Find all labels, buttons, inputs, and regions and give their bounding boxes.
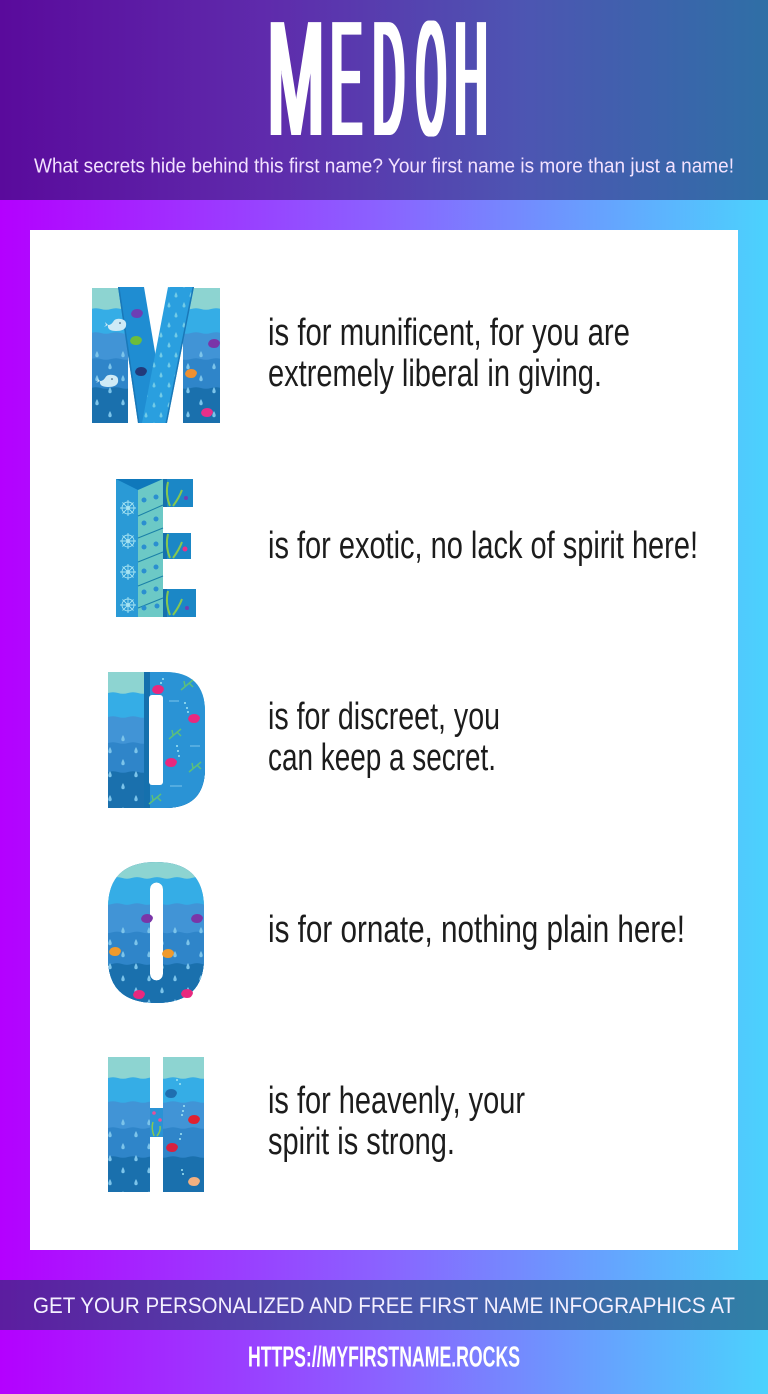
title: MEDOH (268, 0, 487, 170)
panel: white content card (30, 230, 738, 1250)
footer text: GET YOUR PERSONALIZED AND FREE FIRST NAME INFOGRAPHICS AT (33, 1293, 735, 1318)
text: H line: is for heavenly, your (268, 1080, 525, 1122)
header banner (0, 0, 768, 200)
text: D line: is for discreet, you (268, 696, 500, 738)
text: D line: can keep a secret. (268, 737, 496, 779)
letter icon: D (108, 672, 205, 808)
letter icon: O (108, 862, 204, 1003)
letter icon: H (108, 1057, 204, 1192)
text: D line (268, 696, 500, 779)
text: M line (268, 312, 630, 395)
subtitle: What secrets hide behind this first name? Your first name is more than just a name! (34, 156, 734, 178)
text: M line: is for munificent, for you are (268, 312, 630, 354)
footer call-to-action band (0, 1280, 768, 1330)
text: H line (268, 1080, 525, 1163)
text: M line: extremely liberal in giving. (268, 353, 602, 395)
text: H line: spirit is strong. (268, 1121, 455, 1163)
letter icon: M (91, 287, 231, 424)
letter icon: E (116, 479, 196, 617)
footer URL: HTTPS://MYFIRSTNAME.ROCKS (248, 1342, 520, 1374)
